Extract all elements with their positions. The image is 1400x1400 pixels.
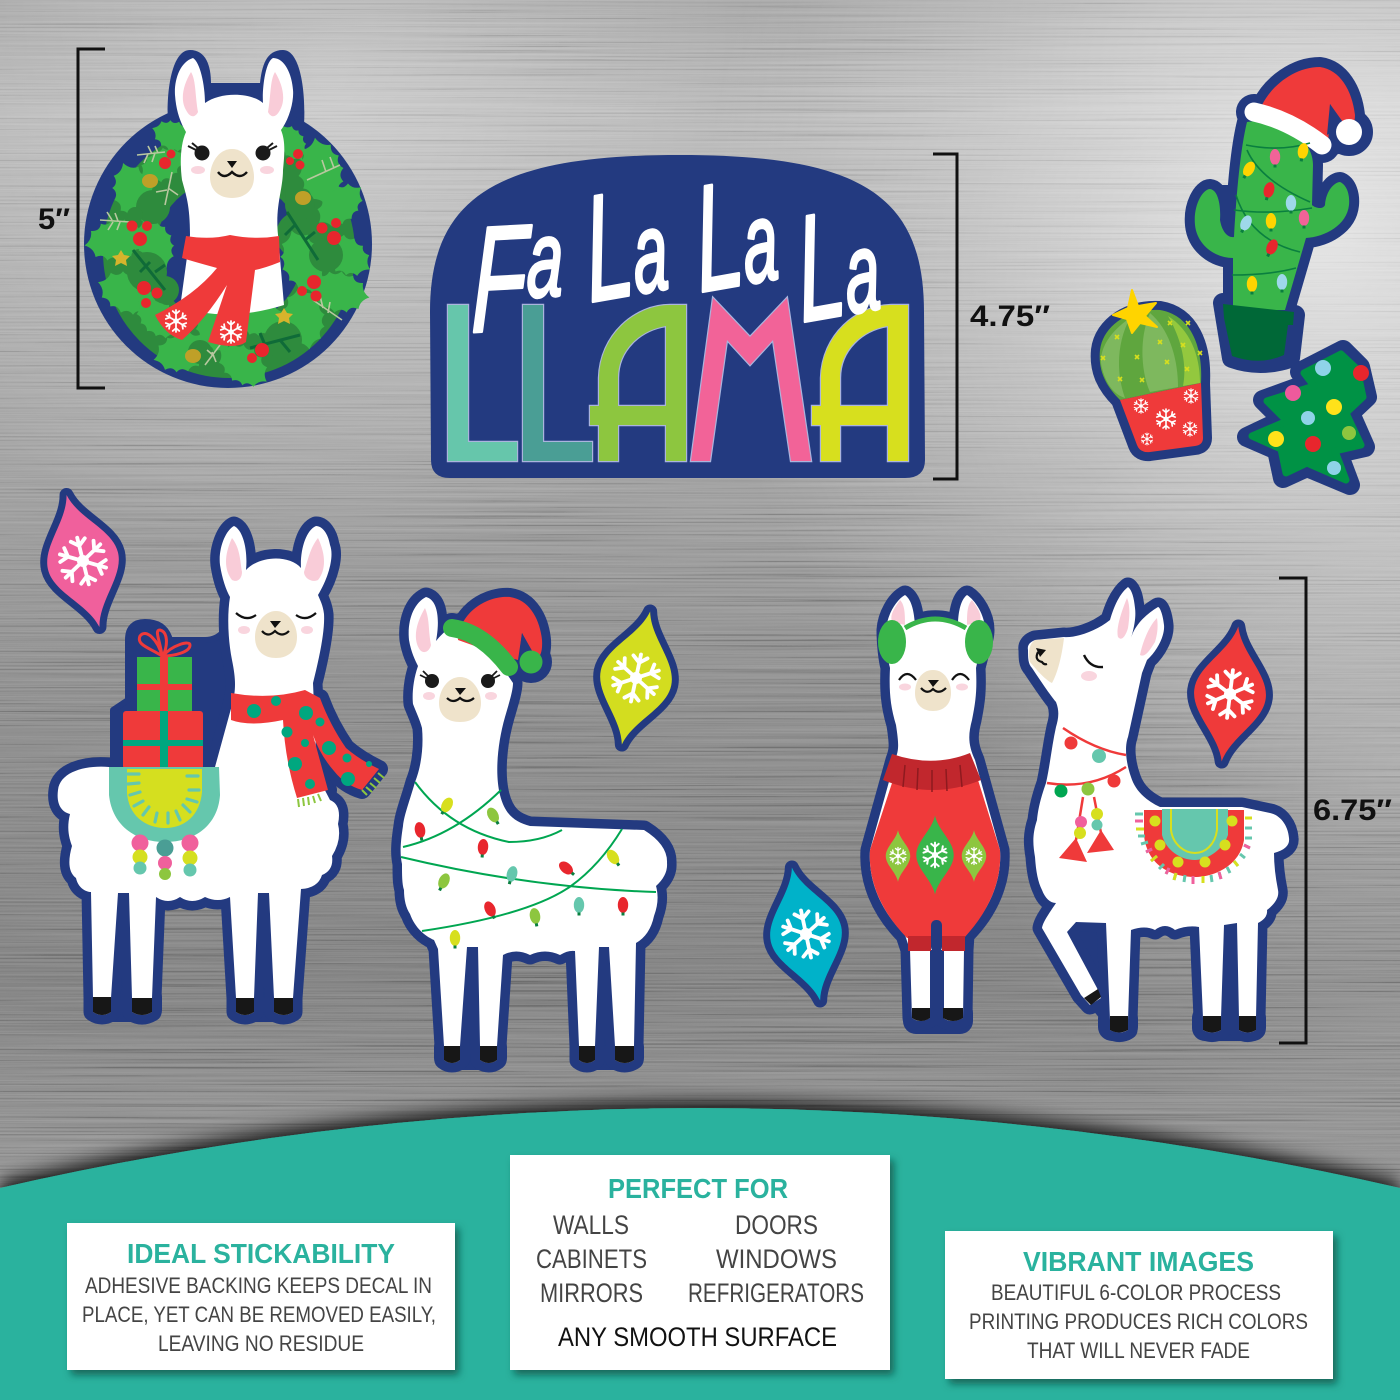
llama body (401, 597, 667, 1063)
panel: vibrant images: THAT WILL NEVER FADE (1027, 1338, 1250, 1363)
panel: perfect for: REFRIGERATORS (688, 1278, 864, 1308)
panel: perfect for: WALLS (553, 1210, 629, 1240)
face (188, 143, 277, 198)
panel: vibrant images: BEAUTIFUL 6-COLOR PROCESS (991, 1280, 1281, 1305)
panel: perfect for: ANY SMOOTH SURFACE (558, 1322, 837, 1352)
face (899, 670, 969, 711)
ornament: pink (32, 486, 134, 636)
pom poms (132, 834, 198, 880)
santa hat (452, 597, 542, 674)
ornament: lime (587, 604, 685, 752)
panel: ideal stickability: IDEAL STICKABILITY (127, 1238, 395, 1269)
script title: Fa La La La: a (526, 197, 564, 320)
panel: ideal stickability (67, 1223, 455, 1370)
dimension bracket: 6.75 inch (1279, 578, 1392, 1043)
muzzle and face (1029, 638, 1103, 683)
cactus with santa hat sticker (1195, 67, 1363, 363)
wreath (81, 114, 380, 397)
needles (1101, 321, 1202, 382)
panel: perfect for: CABINETS (536, 1244, 647, 1274)
baubles (1268, 360, 1369, 475)
llama body (1028, 587, 1289, 1032)
dimension bracket: 5 inch (38, 49, 105, 388)
script title: Fa La La La: F (470, 194, 528, 365)
yellow star (1113, 290, 1157, 333)
necklace (1047, 728, 1126, 862)
llama body (870, 595, 1000, 1021)
face (236, 611, 316, 658)
LLAMA block letters (448, 298, 908, 461)
llama with presents sticker (58, 526, 384, 1022)
dimension bracket: 4.75 inch: 4.75″ (970, 300, 1050, 333)
llama body (58, 526, 339, 1015)
dimension bracket: 5 inch: 5″ (38, 203, 70, 236)
cactus string lights (1232, 143, 1312, 275)
script title: Fa La La La: La (688, 142, 783, 324)
panel: perfect for: DOORS (735, 1210, 818, 1240)
navy backing (1195, 67, 1363, 363)
face (420, 671, 500, 722)
teal curved footer (0, 1108, 1400, 1400)
llama body (175, 58, 293, 314)
christmas tree sticker (1247, 350, 1369, 485)
string lights (401, 782, 656, 931)
panel: ideal stickability: LEAVING NO RESIDUE (158, 1331, 364, 1356)
panel: vibrant images: PRINTING PRODUCES RICH COLORS (969, 1309, 1308, 1334)
panel: ideal stickability: ADHESIVE BACKING KEEPS DECAL IN (85, 1273, 432, 1298)
saddle blanket (1135, 809, 1252, 884)
dimension bracket: 6.75 inch: 6.75″ (1313, 794, 1392, 827)
hat brim and pom (1254, 112, 1322, 145)
hat backing (452, 597, 543, 674)
llama in red sweater sticker (870, 595, 1000, 1034)
title sign sticker (430, 142, 925, 478)
llama with string lights sticker (401, 597, 667, 1070)
script title: Fa La La La: La (578, 152, 673, 334)
polka dot scarf (231, 690, 384, 807)
panel: perfect for: WINDOWS (716, 1244, 837, 1274)
panel: vibrant images: VIBRANT IMAGES (1023, 1246, 1254, 1277)
red scarf (155, 235, 280, 346)
santa hat (1262, 67, 1355, 147)
gift stack (123, 630, 203, 769)
ears, hooves (226, 538, 324, 581)
ornament: blue (757, 860, 855, 1008)
panel: vibrant images (945, 1231, 1333, 1379)
red pot (1120, 383, 1203, 452)
panel: ideal stickability: PLACE, YET CAN BE REMOVED EASILY, (82, 1302, 436, 1327)
saddle blanket (109, 767, 220, 842)
earmuffs (878, 619, 993, 664)
panel: perfect for: MIRRORS (540, 1278, 643, 1308)
side view llama with necklace sticker (1028, 587, 1289, 1041)
script title: Fa La La La (470, 142, 885, 365)
script title: Fa La La La: La (790, 172, 885, 354)
barrel cactus sticker (1100, 290, 1203, 452)
panel: perfect for (510, 1155, 890, 1370)
dimension bracket: 4.75 inch (933, 154, 1050, 479)
panel: perfect for: PERFECT FOR (608, 1173, 788, 1204)
wreath llama sticker (81, 50, 380, 397)
ornament: red (1186, 622, 1274, 766)
scarf backing (297, 698, 379, 798)
red sweater (870, 753, 1000, 952)
